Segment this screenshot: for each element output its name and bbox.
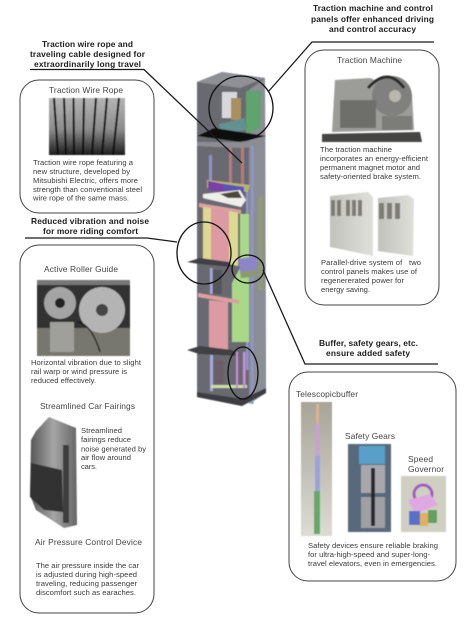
control panels text: Parallel-drive system of two <box>321 258 421 267</box>
fairing text: noise generated by <box>81 444 146 454</box>
heading: safety: Buffer, safety gears, etc. <box>319 338 418 348</box>
wire rope photo <box>49 98 125 155</box>
traction machine text: incorporates an energy-efficient <box>320 154 429 163</box>
fairing image <box>30 417 77 528</box>
heading: comfort: for more riding comfort <box>43 226 138 236</box>
fairing text: Streamlined <box>81 426 122 435</box>
control panels text <box>321 258 421 294</box>
control panels text: control panels makes use of <box>321 267 418 276</box>
roller guide text: rail warp or wind pressure is <box>31 367 127 376</box>
fairing text <box>81 426 146 471</box>
pit <box>197 352 266 406</box>
heading: safety <box>319 338 418 358</box>
heading: wire rope: Traction wire rope and <box>42 39 133 49</box>
leader line: comfort <box>25 238 177 242</box>
speed governor image <box>401 476 446 532</box>
leader line: wire rope <box>30 70 242 163</box>
fairing text: air flow around <box>81 453 131 462</box>
safety gears photo <box>348 444 391 532</box>
title: speed governor: Governor <box>408 464 444 474</box>
description <box>32 158 142 202</box>
safety text: Safety devices ensure reliable braking <box>308 541 438 550</box>
safety text: travel elevators, even in emergencies. <box>308 559 437 568</box>
car body <box>198 207 249 350</box>
panel: comfort features <box>20 245 154 613</box>
panel title: Traction Machine <box>337 55 402 65</box>
fairing text: cars. <box>81 462 97 471</box>
car top <box>199 180 250 214</box>
heading: wire rope: traveling cable designed for <box>30 49 146 59</box>
control panels text: regenererated power for <box>321 276 404 285</box>
heading: traction machine: and control accuracy <box>329 24 416 34</box>
title: speed governor <box>408 454 444 474</box>
title: active roller guide: Active Roller Guide <box>44 264 118 274</box>
fairing text: fairings reduce <box>81 435 131 444</box>
air pressure text <box>36 561 139 597</box>
leader line: traction machine <box>268 42 434 92</box>
roller guide text: Horizontal vibration due to slight <box>31 358 142 367</box>
panel: traction wire rope <box>20 80 154 213</box>
traction machine photo <box>322 76 422 142</box>
heading: wire rope: extraordinarily long travel <box>34 59 141 69</box>
callout circles <box>177 76 273 399</box>
floor slabs <box>187 258 240 356</box>
heading: traction machine <box>311 3 434 34</box>
heading: comfort: Reduced vibration and noise <box>31 216 149 226</box>
panel title: Traction Wire Rope <box>49 85 123 95</box>
air pressure text: The air pressure inside the car <box>36 561 139 570</box>
shaft body <box>197 72 266 406</box>
air pressure text: is adjusted during high-speed <box>36 570 137 579</box>
title: fairings: Streamlined Car Fairings <box>40 401 135 411</box>
panel: safety devices <box>289 372 456 581</box>
heading: wire rope <box>30 39 146 69</box>
description: Traction wire rope featuring a <box>33 158 134 167</box>
telescopic buffer image <box>301 402 332 536</box>
safety text <box>308 541 438 568</box>
ropes and rails <box>209 146 263 404</box>
roller guide photo <box>37 280 130 356</box>
panel: traction machine <box>305 50 439 305</box>
leader line: safety <box>263 270 438 364</box>
machine room <box>197 91 266 148</box>
description: wire rope of the same mass. <box>32 194 129 202</box>
roller guide text <box>31 358 142 385</box>
title: speed governor: Speed <box>408 454 433 464</box>
traction machine text: The traction machine <box>320 145 392 154</box>
heading: traction machine: Traction machine and control <box>313 3 433 13</box>
elevator shaft cutaway <box>187 72 266 406</box>
title: telescopic buffer: Telescopicbuffer <box>296 389 358 399</box>
traction machine text <box>320 145 429 181</box>
heading: traction machine: panels offer enhanced driving <box>311 14 434 24</box>
air pressure text: discomfort such as earaches. <box>36 588 136 597</box>
title: air pressure: Air Pressure Control Device <box>35 537 142 547</box>
description: new structure, developed by <box>33 167 130 176</box>
traction machine text: permanent magnet motor and <box>320 163 420 172</box>
traction machine text: safety-oriented brake system. <box>320 172 421 181</box>
air pressure text: traveling, reducing passenger <box>36 579 137 588</box>
heading: safety: ensure added safety <box>326 348 410 358</box>
safety text: for ultra-high-speed and super-long- <box>308 550 430 559</box>
governor in shaft <box>238 256 258 278</box>
control panels text: energy saving. <box>321 285 370 294</box>
description: strength than conventional steel <box>33 185 142 194</box>
roller guide text: reduced effectively. <box>31 376 96 385</box>
title: safety gears: Safety Gears <box>345 431 395 441</box>
control panels photo <box>330 192 414 256</box>
heading: comfort <box>31 216 149 236</box>
description: Mitsubishi Electric, offers more <box>33 176 138 185</box>
